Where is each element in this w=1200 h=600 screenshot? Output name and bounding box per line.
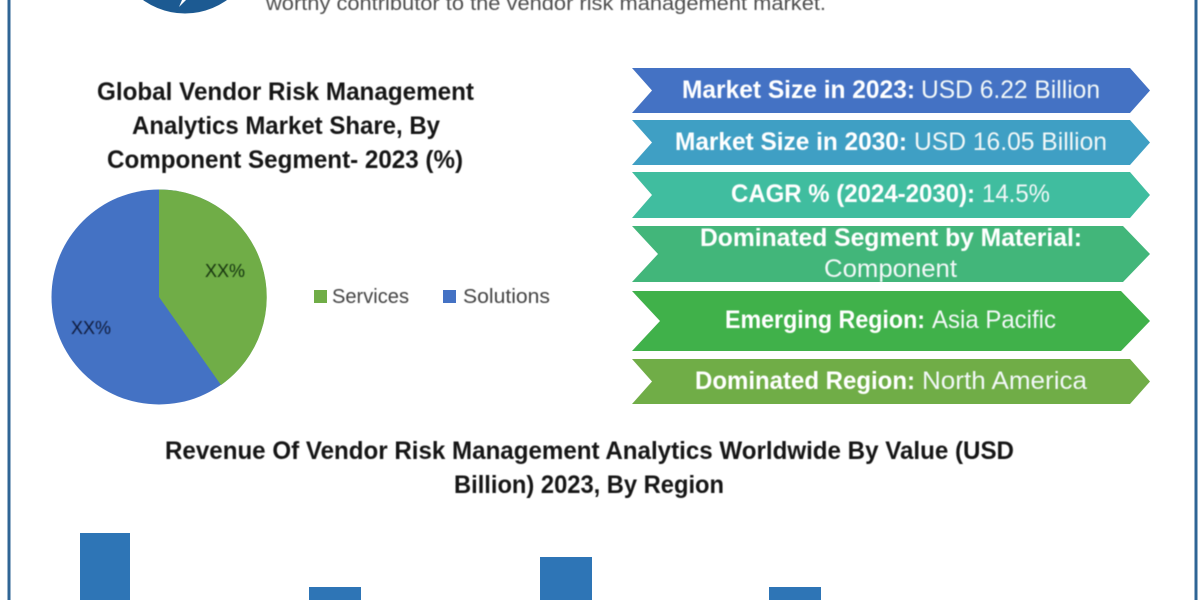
banner: emerging region: Emerging Region: <box>725 306 925 334</box>
heading: bar chart title: Revenue Of Vendor Risk Management Analytics Worldwide By Value (USD <box>165 437 1014 465</box>
heading: bar chart title <box>165 437 1014 499</box>
legend item: solutions: Solutions <box>463 286 550 308</box>
banner: market size 2023: USD 6.22 Billion <box>921 76 1100 104</box>
banner: CAGR <box>632 172 1150 218</box>
heading: pie chart title: Component Segment- 2023 (%) <box>107 146 463 174</box>
banner: market size 2030 <box>632 120 1150 165</box>
banner: dominated segment: Dominated Segment by Material: <box>700 224 1082 252</box>
banner: CAGR: 14.5% <box>982 180 1050 208</box>
bar chart <box>80 533 821 600</box>
banner: market size 2023: Market Size in 2023: <box>682 76 915 104</box>
banner: dominated region: Dominated Region: <box>695 367 915 395</box>
pie chart <box>52 189 267 404</box>
banner: emerging region <box>632 291 1150 351</box>
bar: region 4 <box>769 587 821 600</box>
heading: pie chart title: Analytics Market Share, By <box>132 112 440 140</box>
banner: market size 2030: Market Size in 2030: <box>675 128 907 156</box>
bar: region 1 <box>80 533 130 600</box>
icon: logo badge <box>113 0 257 14</box>
banner: market size 2023 <box>632 68 1150 113</box>
heading: bar chart title: Billion) 2023, By Region <box>454 471 724 499</box>
banner: dominated segment <box>632 224 1150 283</box>
heading: pie chart title <box>97 78 475 174</box>
banner: emerging region: Asia Pacific <box>932 306 1056 334</box>
label: solutions value: XX% <box>71 318 111 338</box>
banner: market size 2030: USD 16.05 Billion <box>914 128 1107 156</box>
legend item: services: Services <box>332 286 409 308</box>
heading: pie chart title: Global Vendor Risk Management <box>97 78 475 106</box>
banner: CAGR: CAGR % (2024-2030): <box>731 180 975 208</box>
banner: dominated region <box>632 359 1150 404</box>
bar: region 3 <box>540 557 592 600</box>
banner: dominated region: North America <box>922 367 1087 395</box>
legend <box>314 286 550 308</box>
pie slice: solutions <box>52 190 266 404</box>
pie slice: services <box>159 189 267 385</box>
bar: region 2 <box>309 587 361 600</box>
banner: dominated segment: Component <box>824 255 957 283</box>
label: services value: XX% <box>205 261 245 281</box>
